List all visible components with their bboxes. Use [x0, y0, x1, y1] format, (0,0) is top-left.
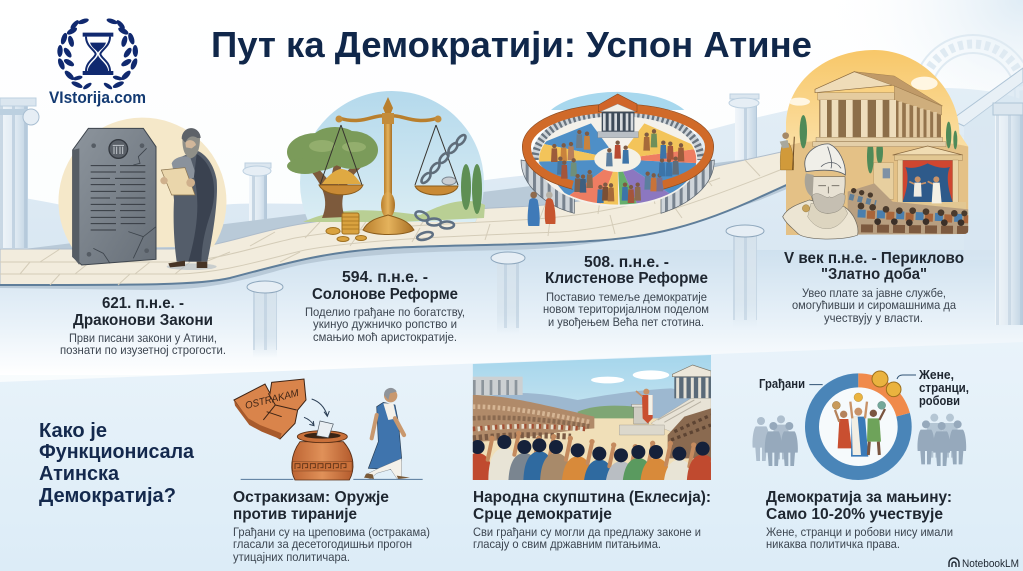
exiled man walking	[364, 388, 410, 479]
donut labels: Грађани	[759, 376, 805, 391]
text block: 594 Solon: Поделио грађане по богатству,	[305, 305, 465, 319]
text block: 594 Solon: укинуо дужничко ропство и	[313, 317, 457, 331]
cypress trees	[461, 164, 482, 214]
column: behind road right	[729, 94, 759, 172]
text block: ostracism: против тираније	[233, 506, 357, 523]
three citizens	[832, 393, 886, 457]
text block: 508 Cleisthenes: новом територијалном поделом	[543, 302, 709, 316]
sky disc	[300, 91, 484, 222]
donut labels: странци,	[919, 380, 969, 395]
assembly hall	[598, 94, 638, 138]
ostrakon shard	[234, 379, 306, 439]
donut labels: Жене,	[918, 367, 954, 382]
text block: assembly	[473, 489, 711, 551]
text block: 621 Draco: познати по изузетној строгости.	[60, 343, 226, 357]
arrows into jar	[304, 399, 329, 426]
text block: 594 Solon	[305, 269, 465, 344]
silhouettes right	[917, 414, 966, 466]
icon: chain on road	[414, 209, 454, 241]
speaker on podium	[619, 389, 664, 435]
logo wordmark: VIstorija.com	[49, 89, 146, 107]
golden sky scene	[784, 48, 971, 235]
temple	[813, 72, 946, 147]
donut center	[819, 387, 898, 466]
hills	[303, 201, 485, 222]
text block: V century Pericles: учествују у власти.	[824, 311, 923, 325]
citizen crowd	[472, 430, 711, 480]
text block: V century Pericles: омогућивши и сиромашнима да	[792, 298, 956, 312]
sun disc	[58, 118, 226, 248]
laurel wreath	[57, 17, 139, 91]
text block: 508 Cleisthenes: Поставио темеље демократије	[546, 290, 707, 304]
text block: 621 Draco: Први писани закони у Атини,	[69, 331, 217, 345]
donut labels: робови	[919, 393, 960, 408]
excluded segment	[858, 380, 903, 415]
icon: olive tree	[287, 127, 378, 218]
column: under road 3	[726, 225, 764, 328]
text block: ostracism: Остракизам: Оружје	[233, 489, 389, 506]
section heading: Како је	[39, 420, 107, 442]
section heading	[39, 420, 195, 507]
text block: V century Pericles: Увео плате за јавне службе,	[802, 286, 946, 300]
text block: ostracism: Грађани су на црепoвима (остракама)	[233, 525, 430, 539]
theatre stage	[874, 146, 966, 210]
text block: ostracism: гласали за десетогодишњи прогон	[233, 537, 412, 551]
arena floor	[538, 113, 698, 207]
text block: assembly: Народна скупштина (Еклесија):	[473, 489, 711, 506]
column: under road 1	[247, 281, 283, 358]
connector lines	[809, 375, 916, 385]
column: behind road left	[243, 163, 271, 242]
voting tribes wedges	[539, 123, 696, 205]
marble bust	[783, 144, 858, 239]
gold coins	[872, 371, 901, 397]
donut labels	[759, 367, 969, 408]
sky dome	[551, 92, 684, 110]
right temple	[651, 365, 711, 432]
text block: assembly: Сви грађани су могли да предлажу законе и	[473, 525, 701, 539]
sky and landscape	[473, 353, 711, 480]
meander medallion	[913, 35, 1023, 155]
text block: 508 Cleisthenes: 508. п.н.е. -	[584, 254, 669, 271]
text block: minority: Само 10-20% учествује	[766, 506, 943, 523]
text block: assembly: Срце демократије	[473, 506, 612, 523]
text block: minority: никаква политичка права.	[766, 537, 900, 551]
text block: V century Pericles: "Златно доба"	[821, 266, 927, 283]
two citizens	[528, 192, 556, 226]
walking citizen with staff	[780, 132, 794, 170]
title: Пут ка Демократији: Успон Атине	[211, 24, 812, 65]
text block: 621 Draco	[60, 295, 226, 357]
text block: V century Pericles: V век п.н.е. - Периклово	[784, 250, 964, 267]
right building and column	[951, 68, 1023, 325]
panel: how democracy functioned	[0, 342, 1023, 571]
section heading: Функционисала	[39, 441, 195, 463]
background columns	[0, 68, 1023, 358]
icon: scales of justice	[319, 97, 458, 234]
text block: minority: Жене, странци и робови нису имали	[766, 525, 953, 539]
text block: 508 Cleisthenes	[543, 254, 709, 329]
right crowd	[668, 408, 711, 458]
timeline 3: Cleisthenes	[521, 92, 714, 226]
ground line	[241, 478, 423, 481]
chart: minority donut	[752, 371, 966, 473]
text block: 508 Cleisthenes: Клистенове Реформе	[545, 270, 708, 287]
section heading: Атинска	[39, 463, 120, 485]
orange ring roof	[527, 108, 709, 185]
citizens segment	[812, 380, 905, 473]
figure: Draco	[160, 128, 217, 270]
text block: 594 Solon: 594. п.н.е. -	[342, 269, 428, 286]
text block: 621 Draco: Драконови Закони	[73, 312, 213, 329]
column: far left	[0, 98, 39, 248]
ostrakon shard: OSTRAKAM	[244, 388, 301, 412]
icon: hourglass	[83, 33, 113, 75]
timeline 4: Pericles	[780, 48, 971, 239]
section heading: Демократија?	[39, 485, 176, 507]
icon: notebook arcs	[949, 558, 959, 567]
NotebookLM badge: NotebookLM	[962, 558, 1019, 570]
audience	[848, 183, 968, 235]
silhouettes left	[752, 415, 798, 466]
clay jar	[292, 421, 353, 480]
illustration: assembly	[472, 355, 711, 480]
illustration: ostracism	[234, 379, 423, 480]
text block: 621 Draco: 621. п.н.е. -	[102, 295, 184, 312]
text block: ostracism	[233, 489, 430, 564]
logo	[49, 17, 146, 107]
central platform	[594, 147, 641, 172]
text block: minority: Демократија за мањину:	[766, 489, 952, 506]
text block: ostracism: утицајних политичара.	[233, 550, 350, 564]
small citizens	[551, 129, 684, 203]
timeline 1: Draco	[58, 118, 226, 270]
icon: broken chain on scale	[420, 133, 467, 185]
text block: assembly: гласају о свим државним питањима.	[473, 537, 661, 551]
text block: 594 Solon: смањио моћ аристократије.	[313, 330, 457, 344]
left stoa and crowd stand	[473, 377, 594, 442]
icon: stone stele	[73, 128, 156, 265]
inner colonnade	[535, 113, 701, 160]
text block: V century Pericles	[784, 250, 964, 325]
text block: 508 Cleisthenes: и увођењем Већа пет стотина.	[548, 315, 704, 329]
colonnade outer wall	[521, 160, 714, 213]
text block: 594 Solon: Солонове Реформе	[312, 286, 458, 303]
column: under road 2	[491, 252, 525, 334]
icon: gold coins	[326, 213, 366, 242]
timeline 2: Solon	[287, 91, 485, 242]
road	[0, 147, 804, 290]
text block: minority	[766, 489, 953, 551]
